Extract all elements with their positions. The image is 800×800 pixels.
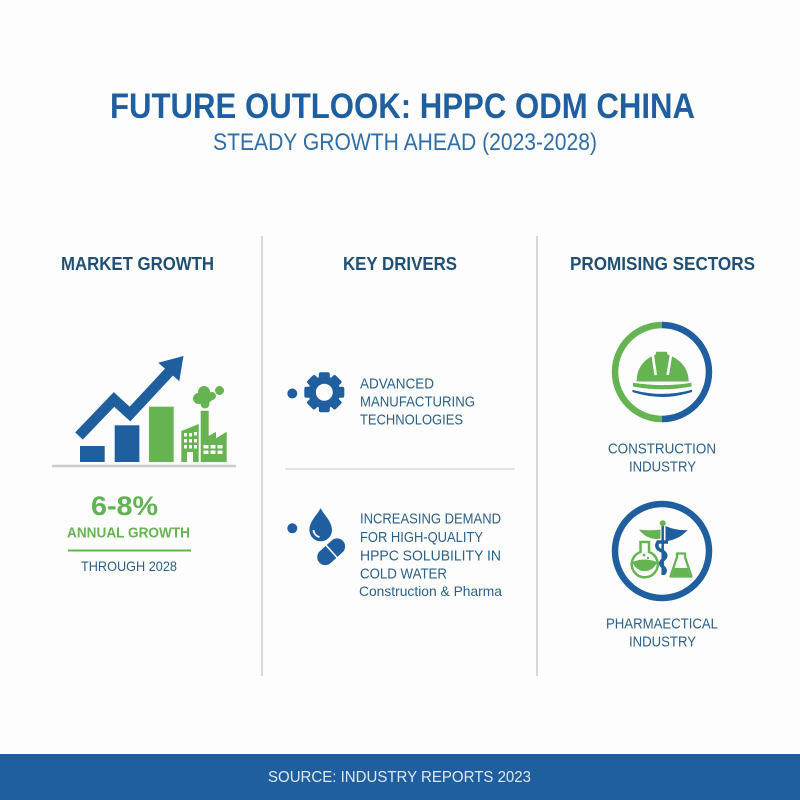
heading: market growth: MARKET GROWTH: [61, 254, 214, 274]
text: increasing demand: FOR HIGH-QUALITY: [360, 529, 483, 546]
stat: growth rate: 6-8%: [91, 491, 158, 521]
title: FUTURE OUTLOOK: HPPC ODM CHINA: [110, 87, 695, 126]
arrow: upward trend: [79, 356, 184, 436]
panel: market growth: [52, 254, 236, 574]
label: construction industry: [608, 440, 716, 476]
text: advanced manufacturing: ADVANCED: [360, 376, 434, 392]
panel: key drivers: [285, 254, 515, 599]
label: construction industry: CONSTRUCTION: [608, 440, 716, 458]
text: increasing demand: [359, 510, 502, 599]
icon: water drop: [309, 508, 332, 541]
text: increasing demand: INCREASING DEMAND: [360, 510, 501, 528]
text: increasing demand: COLD WATER: [360, 566, 447, 582]
label: pharmaceutical industry: PHARMAECTICAL: [606, 616, 718, 632]
heading: key drivers: KEY DRIVERS: [343, 254, 457, 274]
text: advanced manufacturing: [360, 376, 475, 428]
label: construction industry: INDUSTRY: [629, 458, 696, 476]
text: advanced manufacturing: TECHNOLOGIES: [360, 412, 463, 428]
icon: factory: [181, 386, 227, 462]
text: advanced manufacturing: MANUFACTURING: [360, 394, 475, 410]
icon: growth chart with factory: [52, 356, 236, 466]
text: increasing demand: Construction & Pharma: [359, 583, 502, 599]
label: pharmaceutical industry: INDUSTRY: [629, 634, 696, 650]
footer band: [0, 754, 800, 800]
text: increasing demand: HPPC SOLUBILITY IN: [360, 548, 501, 564]
bar chart: [80, 407, 174, 462]
icon: capsule: [314, 535, 349, 569]
source text: SOURCE: INDUSTRY REPORTS 2023: [268, 769, 531, 786]
bullet dot: [287, 523, 297, 533]
icon: caduceus and flasks: [615, 504, 709, 598]
panel: promising sectors: [570, 254, 755, 650]
label: pharmaceutical industry: [606, 616, 718, 650]
bullet dot: [287, 388, 297, 398]
icon: gear: [304, 372, 344, 412]
label: through 2028: THROUGH 2028: [81, 558, 177, 574]
label: annual growth: ANNUAL GROWTH: [67, 524, 190, 542]
icon: hard hat: [615, 325, 709, 419]
heading: promising sectors: PROMISING SECTORS: [570, 254, 755, 274]
subtitle: STEADY GROWTH AHEAD (2023-2028): [213, 129, 597, 156]
